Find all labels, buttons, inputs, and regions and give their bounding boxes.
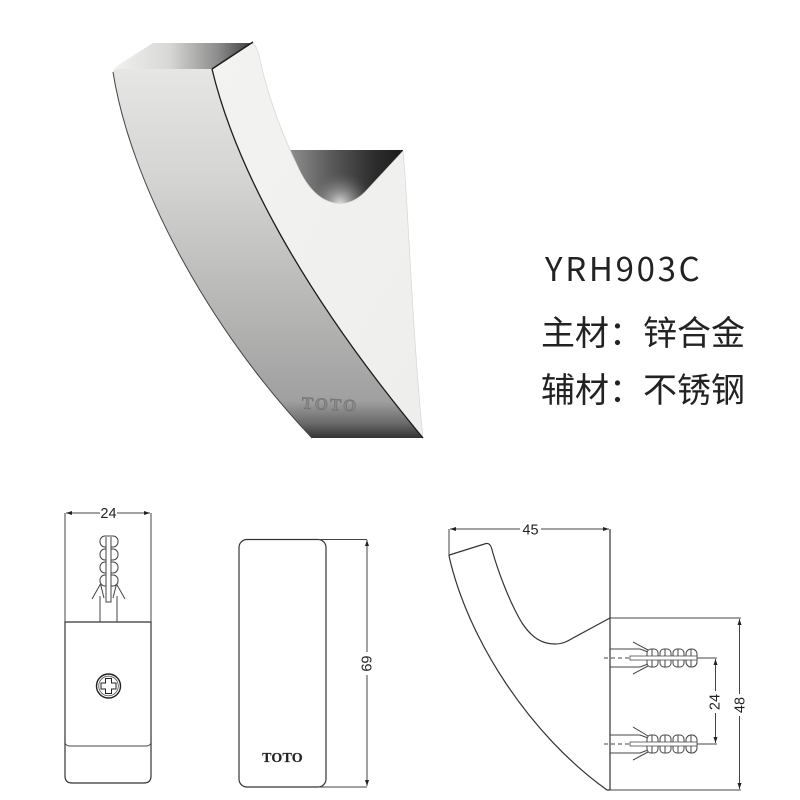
wall line	[609, 529, 611, 790]
front body outline	[239, 540, 326, 787]
width dimension 45: 45	[522, 522, 539, 538]
hook product photo	[113, 42, 423, 438]
height dimension 69: 69	[358, 655, 374, 672]
hook recess shadow	[290, 150, 403, 215]
width dimension 24	[65, 506, 151, 622]
engraved logo: TOTO	[301, 394, 359, 415]
side view drawing	[449, 522, 748, 790]
upper wall anchor	[604, 642, 717, 674]
screw icon	[96, 674, 120, 698]
height dimension 48	[610, 618, 748, 790]
height dimension 48: 48	[732, 697, 748, 713]
height dimension 69	[318, 540, 374, 787]
hook front white face	[212, 43, 423, 438]
wall anchor	[92, 536, 125, 622]
side hook profile	[449, 543, 610, 644]
lower wall anchor	[604, 727, 717, 760]
secondary material: 辅材：不锈钢	[541, 363, 745, 412]
hook ridge edge	[212, 69, 423, 438]
anchor spacing dimension 24	[708, 659, 724, 743]
front logo: TOTO	[262, 751, 303, 766]
rear body outline	[65, 622, 151, 783]
front view drawing	[239, 540, 374, 787]
rear view drawing	[65, 506, 151, 783]
main material: 主材：锌合金	[541, 306, 745, 355]
hook top face	[113, 43, 253, 69]
hook top ridge	[212, 42, 253, 69]
hook outer dark edge	[113, 72, 312, 438]
model number: YRH903C	[544, 243, 702, 291]
hook side face	[113, 69, 423, 438]
width dimension 45	[449, 522, 609, 555]
width dimension 24: 24	[100, 506, 117, 522]
anchor spacing dimension 24: 24	[708, 694, 724, 710]
